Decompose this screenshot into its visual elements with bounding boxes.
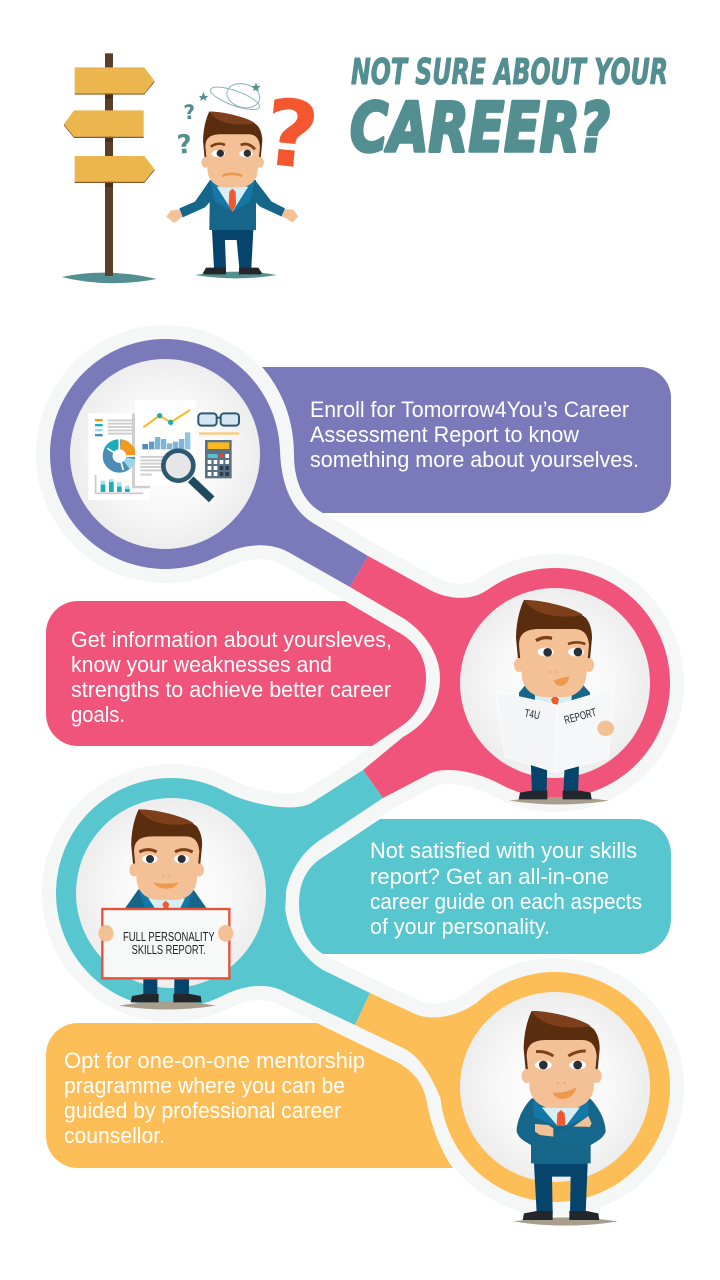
man with crossed arms — [513, 1011, 618, 1226]
step 2 text: strengths to achieve better career — [71, 677, 391, 702]
small question mark: ? — [183, 100, 196, 124]
step 2 text: goals. — [71, 702, 125, 727]
step 4 text — [64, 1048, 365, 1148]
sign text — [123, 929, 215, 957]
step 2 text: know your weaknesses and — [71, 652, 332, 677]
step 4 text: pragramme where you can be — [64, 1073, 345, 1098]
panel: step 3 teal — [56, 770, 671, 1025]
icon: report documents — [88, 400, 239, 500]
report label right: REPORT — [563, 707, 598, 727]
title line 2: CAREER? — [350, 89, 610, 168]
step 2 text: Get information about yoursleves, — [71, 627, 392, 652]
step 4 text: counsellor. — [64, 1123, 165, 1148]
step 1 text: Assessment Report to know — [310, 422, 579, 447]
man holding sign — [98, 809, 233, 1009]
step 3 text — [370, 838, 642, 939]
man reading report — [497, 600, 614, 804]
step 1 text: something more about yourselves. — [310, 447, 639, 472]
text bubble 4 — [46, 1023, 453, 1168]
icon: signpost — [62, 53, 157, 283]
step 1 text: Enroll for Tomorrow4You’s Career — [310, 397, 629, 422]
step 4 text: guided by professional career — [64, 1098, 341, 1123]
step 3 text: of your personality. — [370, 914, 550, 939]
step 3 text: career guide on each aspects — [370, 889, 642, 914]
step 3 text: Not satisfied with your skills — [370, 838, 637, 863]
report label left: T4U — [523, 708, 541, 722]
small question mark lower: ? — [176, 130, 193, 161]
large orange question mark: ? — [259, 79, 323, 191]
step 3 text: report? Get an all-in-one — [370, 864, 609, 889]
sign text: FULL PERSONALITY — [123, 929, 215, 944]
text bubble 3 — [299, 819, 671, 954]
confused man figure — [166, 112, 298, 278]
icon: question marks — [176, 79, 323, 191]
panel: step 2 pink — [46, 556, 670, 804]
step 4 text: Opt for one-on-one mentorship — [64, 1048, 365, 1073]
step 1 text — [310, 397, 639, 472]
dizzy rings and stars — [199, 80, 262, 114]
panel: step 1 purple — [50, 339, 671, 587]
text bubble 2 — [46, 601, 426, 746]
sign text: SKILLS REPORT. — [132, 942, 206, 957]
title — [350, 52, 668, 168]
text bubble 1 — [262, 367, 671, 513]
panel: step 4 orange — [46, 972, 670, 1226]
step 2 text — [71, 627, 392, 727]
